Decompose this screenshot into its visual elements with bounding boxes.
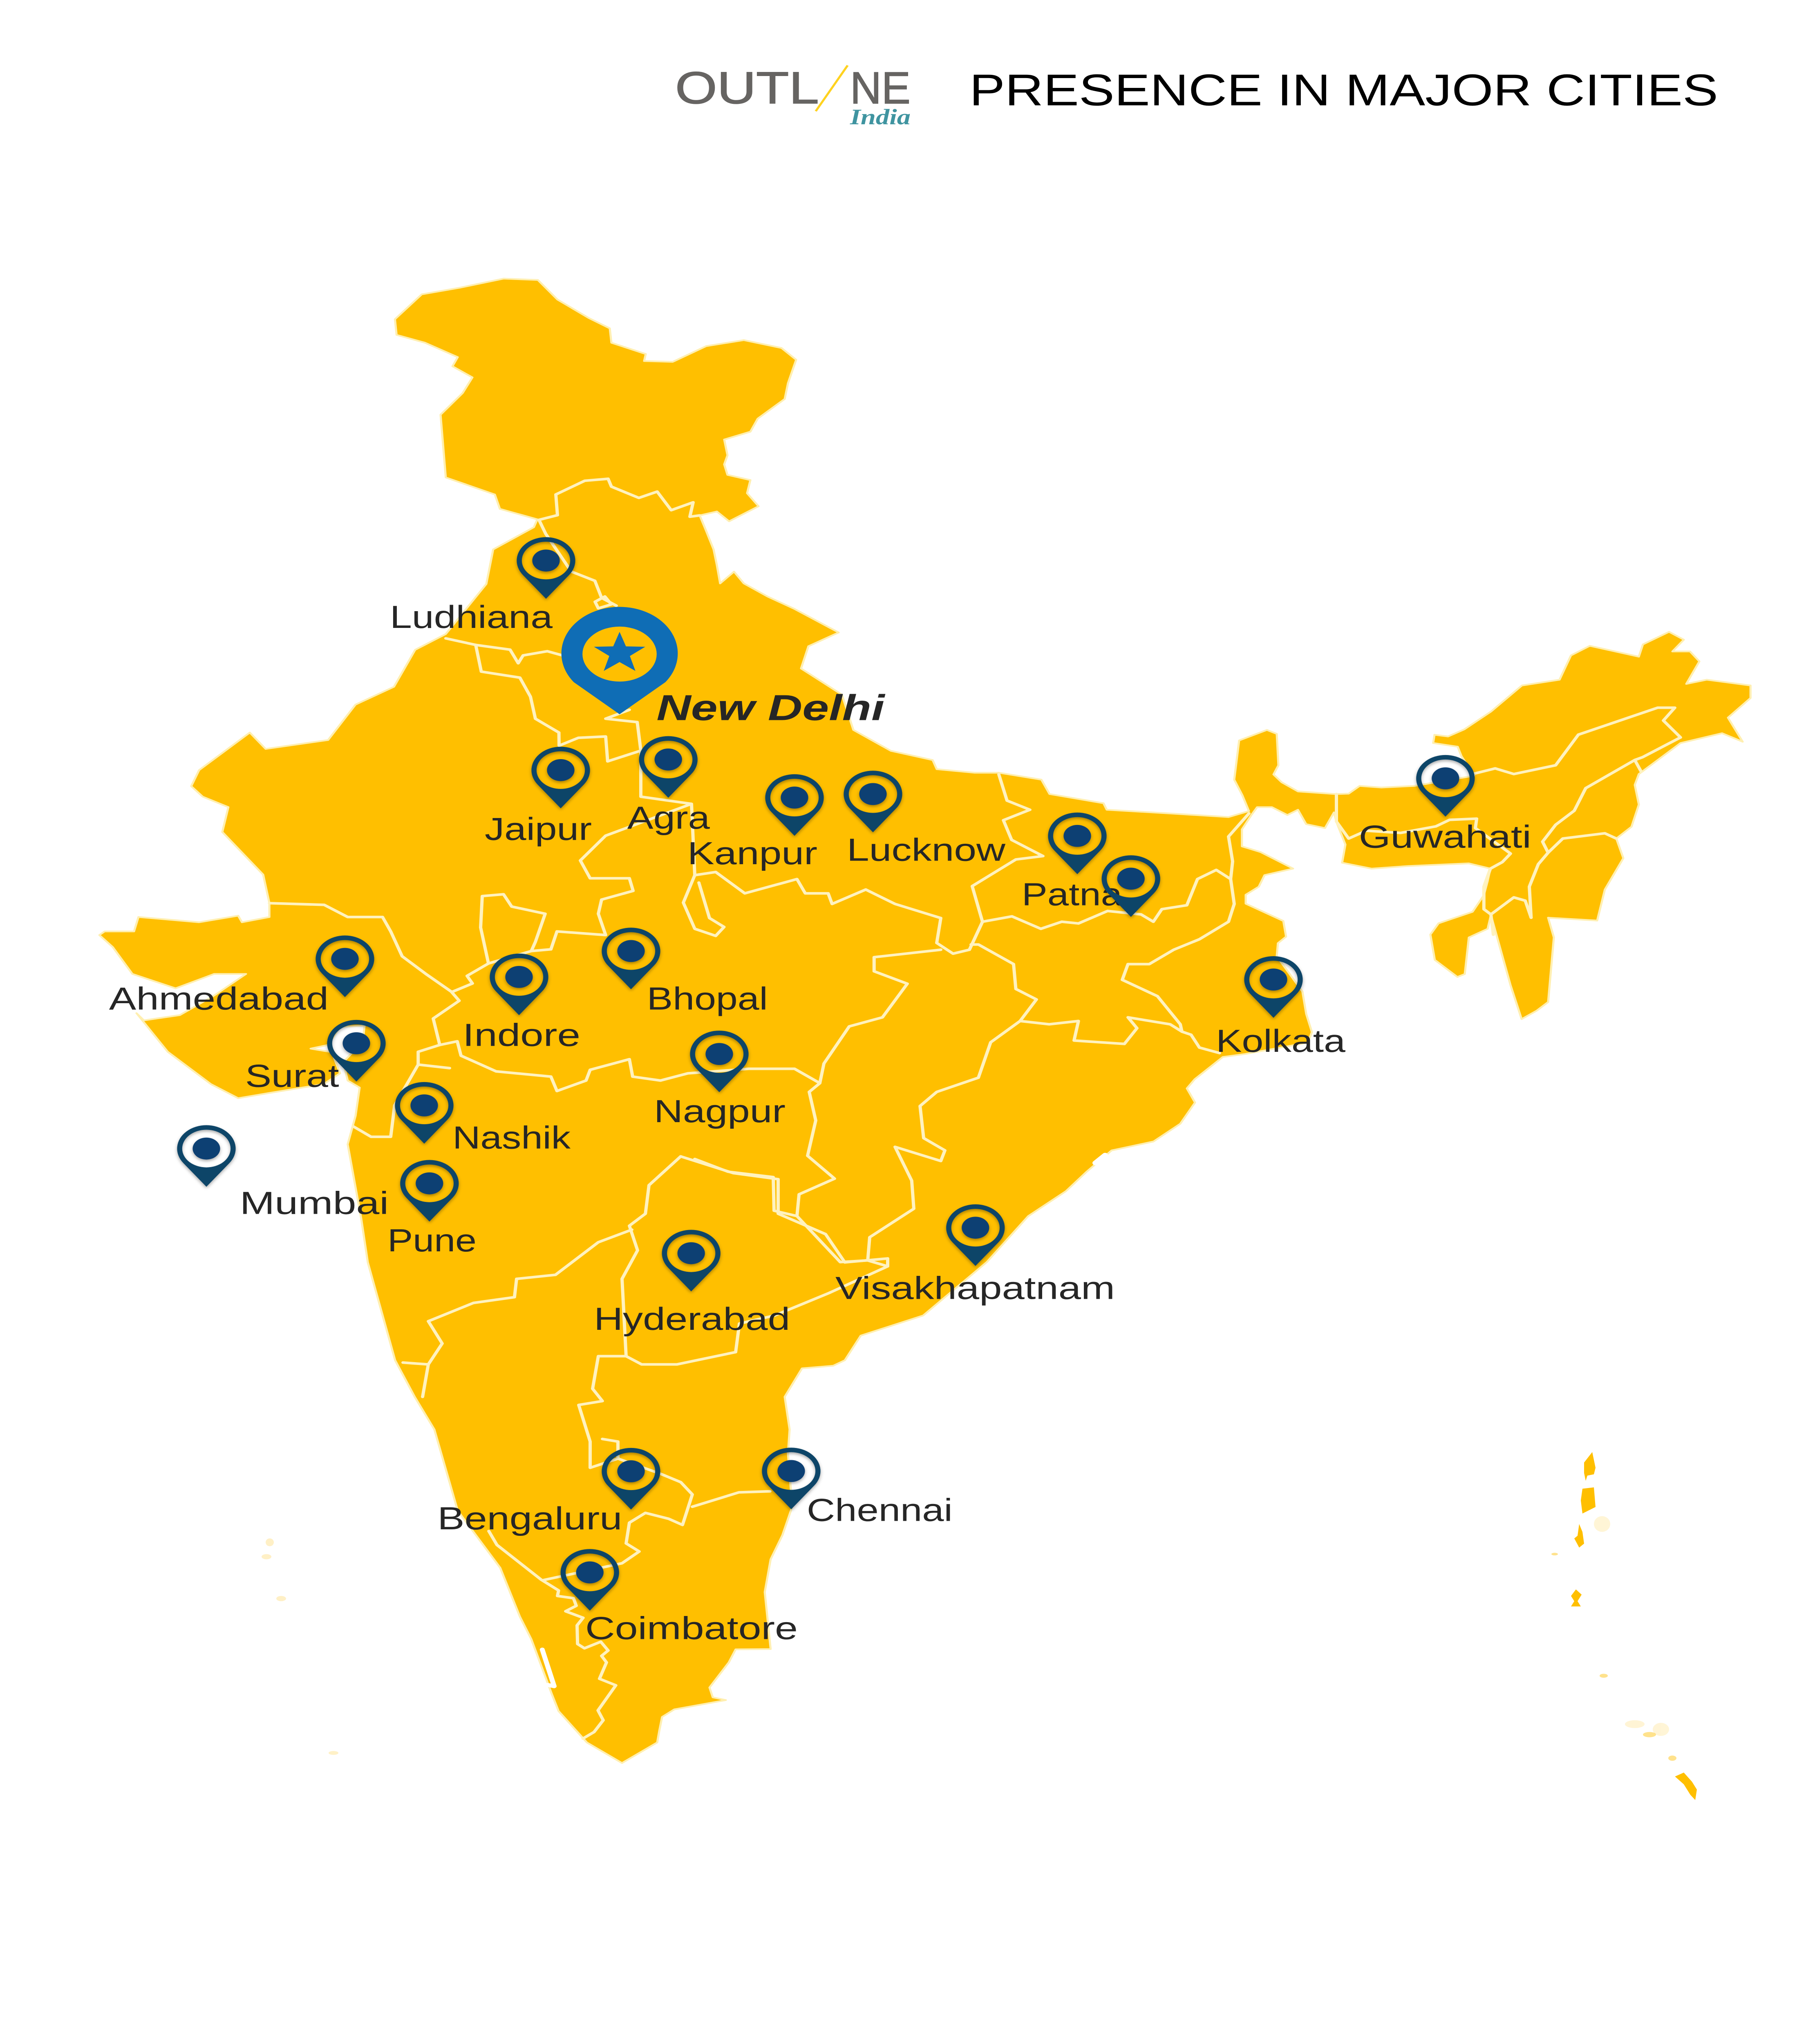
label: Hyderabad: Hyderabad: [594, 1301, 790, 1337]
label: Ludhiana: Ludhiana: [390, 599, 553, 635]
pin: Kolkata: [1244, 956, 1303, 1018]
pin: Lucknow: [844, 771, 902, 832]
pin: Agra: [639, 736, 698, 798]
label: Mumbai: Mumbai: [240, 1185, 389, 1221]
logo: Outline India: NE: [850, 63, 911, 113]
map: Lakshadweep islands: [262, 1538, 338, 1755]
pin: Coimbatore: [561, 1549, 619, 1611]
pin: Jaipur: [531, 747, 590, 808]
label: New Delhi: New Delhi: [656, 688, 886, 728]
pin: Pune: [400, 1160, 459, 1221]
label: Patna: Patna: [1022, 876, 1123, 912]
label: Jaipur: Jaipur: [485, 811, 592, 847]
logo: Outline India: India: [850, 105, 911, 129]
pin: Guwahati: [1416, 755, 1475, 816]
pin: Ahmedabad: [316, 935, 374, 997]
pin: Ludhiana: [517, 537, 575, 599]
pin: Kanpur: [765, 774, 824, 836]
label: Kanpur: Kanpur: [687, 835, 817, 871]
label: Bengaluru: Bengaluru: [437, 1500, 622, 1536]
pin: Patna upper: [1048, 813, 1107, 874]
label: Coimbatore: Coimbatore: [585, 1610, 798, 1646]
label: Indore: Indore: [463, 1017, 580, 1053]
label: Visakhapatnam: Visakhapatnam: [835, 1270, 1115, 1306]
label: Nashik: Nashik: [452, 1120, 571, 1155]
logo: Outline India: OUTL: [675, 63, 819, 113]
pin: Patna lower: [1102, 855, 1160, 917]
label: Kolkata: Kolkata: [1216, 1023, 1346, 1059]
pin: Bhopal: [602, 928, 660, 989]
pin: Chennai: [762, 1448, 821, 1509]
map: India mainland: [99, 279, 1750, 1763]
label: Lucknow: Lucknow: [847, 832, 1006, 867]
label: Ahmedabad: Ahmedabad: [109, 981, 329, 1016]
label: Bhopal: Bhopal: [647, 981, 768, 1016]
map: state boundaries: [269, 479, 1681, 1739]
label: Guwahati: Guwahati: [1359, 819, 1531, 854]
title: PRESENCE IN MAJOR CITIES: [969, 65, 1718, 115]
map: Andaman and Nicobar islands: [1551, 1452, 1697, 1800]
pin: Nagpur: [690, 1031, 749, 1092]
pin: Hyderabad: [662, 1230, 721, 1291]
pin: Visakhapatnam: [946, 1204, 1005, 1266]
logo: Outline India: [675, 63, 911, 129]
pin: Indore: [490, 954, 548, 1015]
label: Pune: Pune: [387, 1222, 477, 1258]
pin: Mumbai: [177, 1125, 236, 1187]
label: Agra: Agra: [627, 800, 710, 836]
label: Surat: Surat: [245, 1058, 339, 1094]
label: Nagpur: Nagpur: [654, 1093, 786, 1129]
pin: New Delhi headquarters: [562, 607, 678, 714]
pin: Bengaluru: [602, 1448, 660, 1509]
label: Chennai: Chennai: [807, 1492, 953, 1528]
pin: Surat: [327, 1020, 386, 1081]
pin: Nashik: [395, 1082, 454, 1143]
